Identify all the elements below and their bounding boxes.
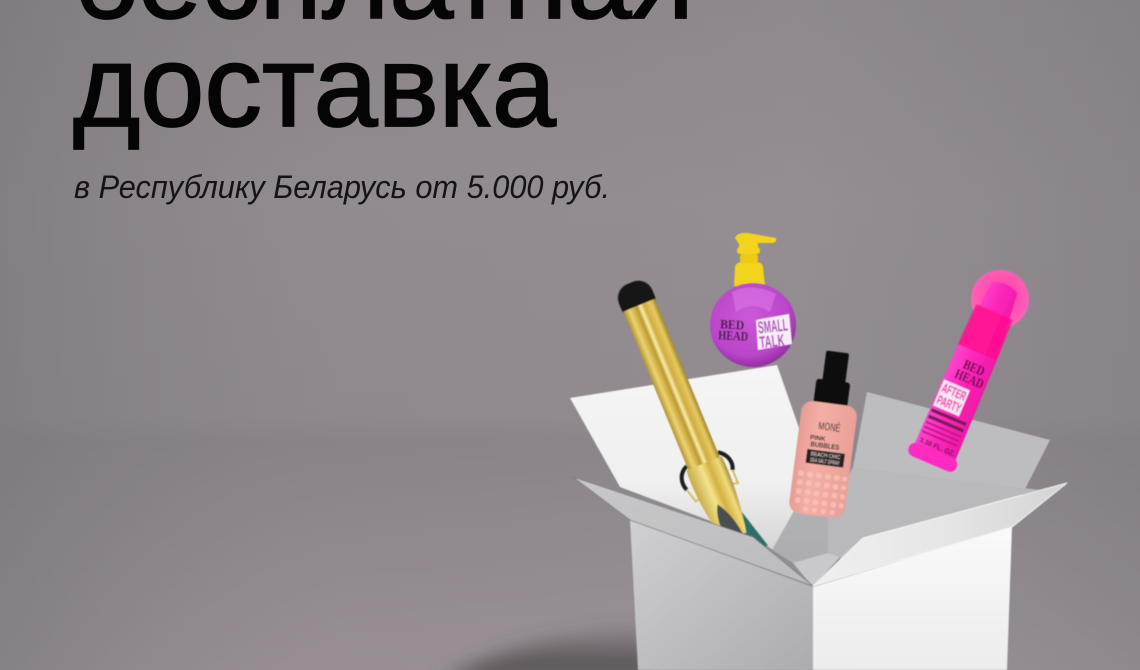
tube label: HEAD xyxy=(952,367,986,393)
box inner corner shade xyxy=(772,500,828,563)
box front-right flap xyxy=(813,483,1067,586)
label Bed Head xyxy=(718,316,749,344)
box front-left flap xyxy=(573,477,813,586)
textured dots xyxy=(793,470,848,517)
gold barrel xyxy=(623,299,721,473)
subtitle: в Республику Беларусь от 5.000 руб. xyxy=(74,169,610,205)
title: доставка xyxy=(73,21,556,151)
box back and inside xyxy=(570,365,1050,587)
label Small Talk: TALK xyxy=(759,331,786,352)
bottle label xyxy=(805,418,849,468)
bottle label: BEACH CHIC xyxy=(810,451,841,461)
tube label xyxy=(917,353,991,458)
pink tube xyxy=(914,276,1027,462)
label Small Talk: SMALL xyxy=(757,315,789,337)
box front xyxy=(573,477,1067,670)
box back-left flap and inner wall xyxy=(570,365,828,563)
title xyxy=(73,0,694,151)
tube label: BED xyxy=(961,358,987,380)
box right face xyxy=(813,527,1012,670)
clamp cone xyxy=(686,456,753,545)
peach bottle xyxy=(788,400,858,519)
flange xyxy=(906,441,959,474)
curling iron xyxy=(605,272,769,569)
bottle label: BUBBLES xyxy=(810,441,840,452)
product: After Party tube xyxy=(903,261,1038,475)
label Bed Head: BED xyxy=(720,316,745,333)
tube label: PARTY xyxy=(935,392,964,416)
black tip xyxy=(613,276,660,323)
yellow pump xyxy=(734,233,776,286)
translucent cap ball xyxy=(962,261,1038,337)
product: Small Talk jar xyxy=(710,233,796,367)
product: Mone Pink Bubbles spray xyxy=(788,348,865,519)
handle xyxy=(714,499,769,563)
box back-right flap xyxy=(840,392,1050,560)
purple ball xyxy=(710,283,796,367)
bottle label: SEA SALT SPRAY xyxy=(809,457,840,467)
tube label: AFTER xyxy=(940,380,969,404)
box inner floor xyxy=(793,553,840,587)
wire stand xyxy=(677,449,740,503)
label Bed Head: HEAD xyxy=(718,327,749,344)
bottle label: PINK xyxy=(810,434,826,443)
tube label: 3.38 FL. OZ. xyxy=(918,437,956,458)
box right inner wall xyxy=(828,467,1040,557)
box left face xyxy=(630,520,813,670)
bottle label: MONÉ xyxy=(818,419,841,435)
label Small Talk xyxy=(756,314,792,352)
black spray head xyxy=(813,350,854,411)
